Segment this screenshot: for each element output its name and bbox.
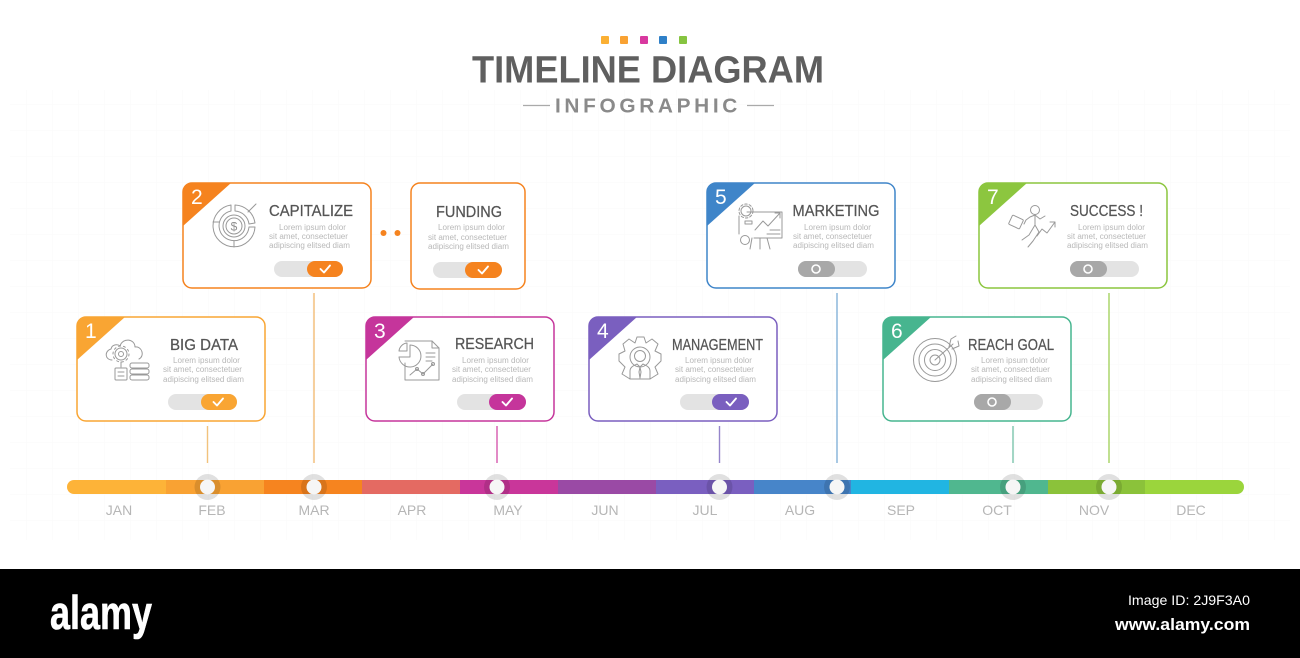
description: sit amet, consectetuer xyxy=(452,365,531,374)
title: TIMELINE DIAGRAM xyxy=(472,50,824,92)
card: funding xyxy=(411,183,525,289)
timeline bar xyxy=(67,480,1244,494)
description: adipiscing elitsed diam xyxy=(452,375,533,384)
badge 4: 4 xyxy=(597,320,609,343)
card 5: marketing xyxy=(707,183,895,288)
description: sit amet, consectetuer xyxy=(675,365,754,374)
description xyxy=(269,223,350,250)
heading: CAPITALIZE xyxy=(269,203,353,220)
description xyxy=(1067,223,1148,250)
toggle xyxy=(680,394,749,410)
description xyxy=(428,223,509,251)
image id: Image ID: 2J9F3A0 xyxy=(1128,592,1250,608)
description: sit amet, consectetuer xyxy=(971,365,1050,374)
month labels: SEP xyxy=(887,502,915,518)
icon: money target: $ xyxy=(231,220,238,234)
month labels: AUG xyxy=(785,502,815,518)
card 1: big data xyxy=(77,317,265,421)
description: Lorem ipsum dolor xyxy=(279,223,346,232)
month labels: NOV xyxy=(1079,502,1110,518)
month labels: MAR xyxy=(298,502,330,518)
toggle xyxy=(274,261,343,277)
badge 2: 2 xyxy=(191,186,203,209)
heading: MANAGEMENT xyxy=(672,337,763,354)
timeline nodes xyxy=(194,474,1122,500)
month labels: DEC xyxy=(1176,502,1206,518)
description: Lorem ipsum dolor xyxy=(804,223,871,232)
icon: money target xyxy=(213,204,256,247)
description: Lorem ipsum dolor xyxy=(1078,223,1145,232)
subtitle: INFOGRAPHIC xyxy=(555,96,741,118)
description: adipiscing elitsed diam xyxy=(1067,241,1148,250)
toggle xyxy=(798,261,867,277)
heading: MARKETING xyxy=(792,203,880,220)
description: Lorem ipsum dolor xyxy=(438,223,505,232)
badge 1 xyxy=(77,317,125,360)
description xyxy=(793,223,874,250)
icon: target xyxy=(914,336,959,382)
description: Lorem ipsum dolor xyxy=(981,356,1048,365)
heading: FUNDING xyxy=(436,204,502,221)
description xyxy=(971,356,1052,384)
month labels xyxy=(106,502,1206,518)
description: adipiscing elitsed diam xyxy=(428,242,509,251)
icon: gear person xyxy=(619,337,661,379)
card 2: capitalize xyxy=(183,183,371,288)
month labels: JUN xyxy=(591,502,619,518)
heading: SUCCESS ! xyxy=(1070,203,1143,220)
icon: running businessman xyxy=(1008,206,1055,247)
icon: cloud data xyxy=(106,340,149,380)
badge 6 xyxy=(883,317,931,360)
description: adipiscing elitsed diam xyxy=(675,375,756,384)
badge 3: 3 xyxy=(374,320,386,343)
month labels: MAY xyxy=(493,502,523,518)
description: sit amet, consectetuer xyxy=(163,365,242,374)
description: Lorem ipsum dolor xyxy=(173,356,240,365)
month labels: JUL xyxy=(693,502,718,518)
toggle xyxy=(1070,261,1139,277)
footer band xyxy=(0,569,1300,658)
heading: REACH GOAL xyxy=(968,337,1054,354)
description: adipiscing elitsed diam xyxy=(163,375,244,384)
month labels: FEB xyxy=(198,502,226,518)
description: adipiscing elitsed diam xyxy=(269,241,350,250)
toggle xyxy=(168,394,237,410)
icon: report xyxy=(399,341,439,380)
badge 7 xyxy=(979,183,1027,226)
badge 2 xyxy=(183,183,231,226)
card 6: reach goal xyxy=(883,317,1071,421)
description: adipiscing elitsed diam xyxy=(971,375,1052,384)
badge 6: 6 xyxy=(891,320,903,343)
description: Lorem ipsum dolor xyxy=(462,356,529,365)
description: sit amet, consectetuer xyxy=(269,232,348,241)
description: Lorem ipsum dolor xyxy=(685,356,752,365)
badge 5 xyxy=(707,183,755,226)
heading: BIG DATA xyxy=(170,337,239,354)
card 7: success xyxy=(979,183,1167,288)
description: sit amet, consectetuer xyxy=(1067,232,1146,241)
connector dots xyxy=(380,230,400,236)
month labels: APR xyxy=(398,502,426,518)
stems connecting cards to timeline xyxy=(208,293,1109,463)
badge 5: 5 xyxy=(715,186,727,209)
card 4: management xyxy=(589,317,777,421)
description: sit amet, consectetuer xyxy=(428,233,507,242)
badge 3 xyxy=(366,317,414,360)
icon: presentation board xyxy=(739,204,782,249)
description xyxy=(675,356,756,384)
badge 1: 1 xyxy=(85,320,97,343)
card 3: research xyxy=(366,317,554,421)
title color squares xyxy=(601,36,687,44)
month labels: JAN xyxy=(106,502,132,518)
description: sit amet, consectetuer xyxy=(793,232,872,241)
description: adipiscing elitsed diam xyxy=(793,241,874,250)
badge 4 xyxy=(589,317,637,360)
footer logo: alamy xyxy=(50,586,152,639)
description xyxy=(452,356,533,384)
badge 7: 7 xyxy=(987,186,999,209)
website: www.alamy.com xyxy=(1114,616,1250,634)
description xyxy=(163,356,244,384)
toggle xyxy=(974,394,1043,410)
month labels: OCT xyxy=(982,502,1012,518)
toggle xyxy=(457,394,526,410)
heading: RESEARCH xyxy=(455,336,534,353)
toggle xyxy=(433,262,502,278)
